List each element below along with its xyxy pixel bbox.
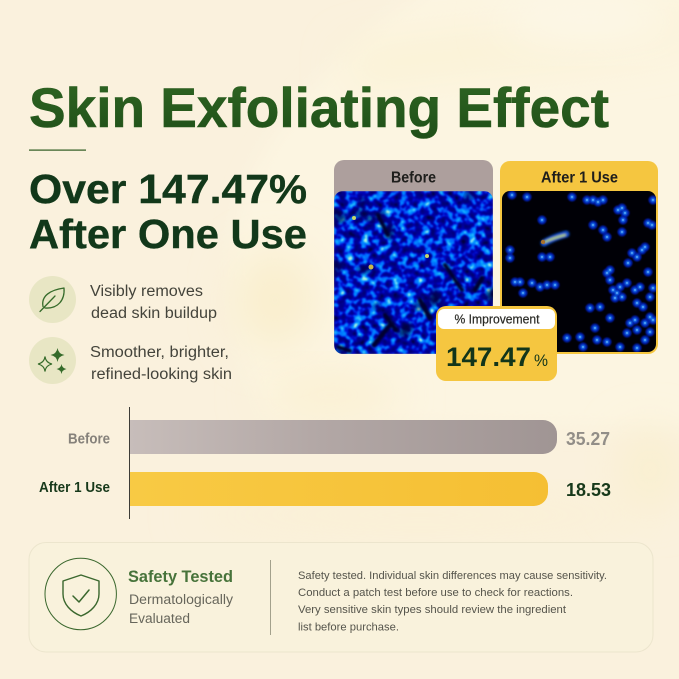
title: Skin Exfoliating Effect	[29, 76, 609, 139]
bar: before: 35.27	[566, 428, 610, 449]
panel: after heat map: After 1 Use	[541, 170, 618, 186]
callout: percent improvement: % Improvement	[454, 312, 540, 326]
heat map: before	[334, 191, 493, 354]
callout: percent improvement: 147.47	[446, 342, 531, 372]
icon: leaf	[29, 276, 76, 323]
benefit: removes dead skin	[29, 276, 217, 323]
benefit text: dead skin buildup	[91, 305, 217, 322]
safety heading	[128, 568, 233, 626]
bar chart: before vs after	[39, 407, 611, 519]
bar: after 1 use: After 1 Use	[39, 480, 110, 496]
callout: percent improvement: %	[534, 351, 548, 370]
bar: after 1 use	[39, 472, 611, 506]
safety heading: Evaluated	[129, 611, 190, 626]
icon: sparkles	[29, 337, 76, 384]
panel: before heat map: Before	[391, 170, 436, 186]
benefit text	[90, 344, 232, 383]
heat map: after	[502, 191, 656, 352]
headline	[29, 166, 307, 257]
panel: after heat map	[500, 161, 658, 354]
safety disclaimer text	[298, 570, 607, 634]
safety disclaimer text: Conduct a patch test before use to check for reactions.	[298, 587, 573, 599]
benefit text: Smoother, brighter,	[90, 344, 229, 361]
benefit text: refined-looking skin	[91, 366, 232, 383]
headline: Over 147.47%	[29, 166, 307, 212]
benefit text: Visibly removes	[90, 283, 203, 300]
panel: safety tested	[29, 542, 653, 652]
safety heading: Dermatologically	[129, 592, 233, 607]
callout: percent improvement	[436, 306, 557, 381]
safety disclaimer text: Very sensitive skin types should review the ingredient	[298, 604, 566, 616]
benefit: smoother skin	[29, 337, 232, 384]
safety disclaimer text: Safety tested. Individual skin differences may cause sensitivity.	[298, 570, 607, 582]
safety disclaimer text: list before purchase.	[298, 622, 399, 634]
bar: after 1 use: 18.53	[566, 479, 611, 500]
panel: before heat map	[334, 160, 493, 354]
bar: before	[68, 420, 610, 454]
bar: before: Before	[68, 432, 110, 448]
headline: After One Use	[29, 211, 307, 257]
safety heading: Safety Tested	[128, 568, 233, 586]
benefit text	[90, 283, 217, 322]
icon: shield check	[45, 558, 116, 630]
